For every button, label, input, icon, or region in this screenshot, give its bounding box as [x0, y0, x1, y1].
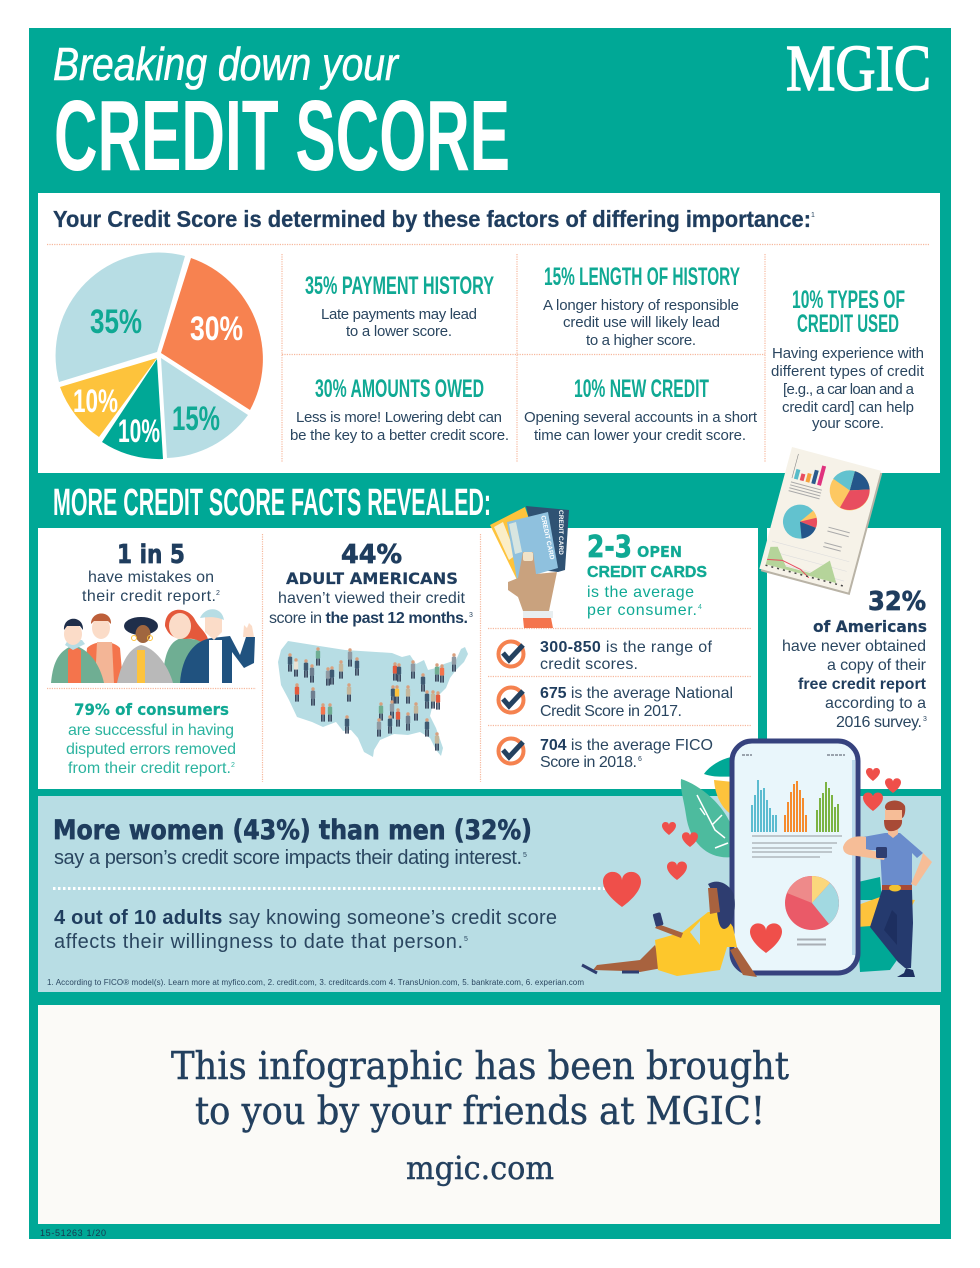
factor: new credit: time can lower your credit score.	[534, 427, 746, 444]
stat text: a copy of their	[827, 657, 927, 674]
title main line: CREDIT SCORE	[54, 80, 510, 192]
stat: 79% of consumers	[66, 700, 236, 777]
factor: types of credit: credit card] can help	[782, 399, 914, 416]
factor: amounts owed	[290, 375, 509, 444]
factor: amounts owed: Less is more! Lowering debt can	[296, 409, 502, 426]
footnotes: 1. According to FICO® model(s). Learn more at myfico.com, 2. credit.com, 3. creditcards.com 4. TransUnion.com, 5. bankrate.com, 6. experian.com	[47, 978, 584, 987]
stat: 44% adult americans: haven’t viewed their credit	[278, 590, 466, 607]
stat: 44% adult americans: 44%	[341, 540, 402, 570]
icon: report document	[759, 447, 883, 595]
fact: FICO average: Score in 2018.	[540, 754, 637, 771]
fact: national average	[498, 685, 733, 720]
factor: length of history: to a higher score.	[586, 332, 696, 349]
factor: payment history: Late payments may lead	[321, 306, 477, 323]
pie chart: 10%	[73, 383, 118, 419]
stat text: 32%	[868, 587, 926, 617]
dating stat: 4 out of 10: 4 out of 10 adults say knowing someone’s credit score	[54, 907, 557, 929]
icon: hand holding credit cards	[490, 506, 569, 628]
stat: 1 in 5: have mistakes on	[88, 569, 214, 586]
fact: national average: Credit Score in 2017.	[540, 703, 682, 720]
stat: 2-3 open credit cards: 4	[698, 604, 702, 611]
pie chart	[56, 253, 263, 459]
dating stat: women vs men: 5	[523, 852, 527, 859]
stat: 2-3 open credit cards: is the average	[587, 584, 694, 601]
illustration: woman with phone	[582, 882, 757, 977]
factor: new credit: Opening several accounts in a short	[524, 409, 758, 426]
fact: score range: 300-850 is the range of	[540, 639, 713, 656]
stat: 1 in 5: 1 in 5	[117, 540, 185, 570]
panel: credit score factors	[38, 193, 940, 473]
stat: 44% adult americans	[269, 540, 473, 627]
panel: credit score factors: 1	[811, 212, 815, 219]
illustration: phone with charts	[732, 741, 858, 973]
pie chart: 35%	[90, 303, 142, 341]
stat: 2-3 open credit cards: per consumer.	[587, 602, 697, 619]
factor: types of credit: [e.g., a car loan and a	[783, 381, 915, 398]
hearts	[603, 768, 901, 907]
factor: length of history: 15% LENGTH OF HISTORY	[544, 263, 740, 291]
dating stat: 4 out of 10: affects their willingness to date that person.	[54, 931, 463, 953]
stat text: free credit report	[798, 676, 927, 693]
MGIC logo: MGIC	[786, 32, 931, 105]
header	[53, 32, 931, 192]
title script line: Breaking down your	[53, 38, 399, 90]
fact: score range	[498, 639, 713, 673]
dating stat: 4 out of 10	[54, 907, 557, 953]
stat: 1 in 5: their credit report.	[82, 588, 216, 605]
illustration: man leaning on phone	[843, 800, 932, 977]
stat: 79% of consumers: 79% of consumers	[74, 700, 229, 719]
factor: payment history	[305, 272, 494, 340]
pie chart: 10%	[118, 413, 160, 449]
factor: new credit: 10% NEW CREDIT	[574, 375, 709, 403]
factor: types of credit: Having experience with	[772, 345, 924, 362]
panel: closing message	[38, 1005, 940, 1224]
dating stat: 4 out of 10: 5	[464, 936, 468, 943]
pie chart: 30%	[190, 310, 243, 348]
pie chart: 15%	[172, 400, 220, 438]
stat text: of Americans	[813, 617, 927, 636]
panel: credit facts	[38, 506, 758, 789]
stat: 79% of consumers: are successful in having	[68, 722, 234, 739]
stat: 79% of consumers: from their credit report.	[68, 760, 231, 777]
stat text	[782, 587, 927, 731]
factor: types of credit: your score.	[812, 415, 884, 432]
icon: hand holding credit cards: CREDIT CARD	[539, 515, 555, 561]
factor: length of history: credit use will likely lead	[563, 314, 720, 331]
dating stat: women vs men	[53, 815, 532, 869]
closing line one: This infographic has been brought	[171, 1044, 789, 1088]
facts heading: MORE CREDIT SCORE FACTS REVEALED:	[53, 482, 491, 524]
factor: types of credit	[771, 286, 925, 432]
stat: 79% of consumers: disputed errors removed	[66, 741, 236, 758]
stat: 44% adult americans: ADULT AMERICANS	[286, 569, 458, 588]
factor: types of credit: CREDIT USED	[797, 310, 899, 338]
factor: new credit	[524, 375, 758, 444]
stat: 2-3 open credit cards	[587, 530, 707, 619]
print code: 15-51263 1/20	[40, 1228, 106, 1238]
factor: amounts owed: 30% AMOUNTS OWED	[315, 375, 484, 403]
factor: types of credit: different types of credit	[771, 363, 925, 380]
icon: hand holding credit cards: CREDIT CARD	[557, 510, 564, 555]
stat: 2-3 open credit cards: CREDIT CARDS	[587, 564, 707, 581]
factor: types of credit: 10% TYPES OF	[792, 286, 905, 314]
panel: 32% of Americans	[759, 447, 941, 789]
factor: payment history: to a lower score.	[346, 323, 452, 340]
fact: FICO average	[498, 737, 713, 771]
factor: payment history: 35% PAYMENT HISTORY	[305, 272, 494, 300]
closing line two: to you by your friends at MGIC!	[195, 1089, 765, 1133]
stat text: have never obtained	[782, 638, 926, 655]
dating stat: women vs men: say a person’s credit score impacts their dating interest.	[54, 847, 522, 869]
fact: FICO average: 704 is the average FICO	[540, 737, 713, 754]
panel: dating and credit	[38, 741, 941, 992]
stat: 2-3 open credit cards: OPEN	[637, 543, 682, 561]
fact: FICO average: 6	[638, 756, 642, 763]
stat text: 2016 survey.	[836, 714, 922, 731]
stat: 44% adult americans: 3	[469, 612, 473, 619]
stat: 1 in 5: 2	[216, 590, 220, 597]
stat: 79% of consumers: 2	[231, 762, 235, 769]
illustration: leaves behind phone	[681, 757, 915, 972]
dating stat: women vs men: More women (43%) than men (32%)	[53, 815, 532, 846]
website: mgic.com	[406, 1149, 554, 1187]
factor: length of history: A longer history of responsible	[543, 297, 739, 314]
fact: score range: credit scores.	[540, 656, 638, 673]
factor: length of history	[543, 263, 740, 349]
fact: national average: 675 is the average National	[540, 685, 733, 702]
illustration: group of people	[51, 609, 255, 683]
map of US with people	[278, 641, 468, 757]
stat text: according to a	[825, 695, 926, 712]
stat: 2-3 open credit cards: 2-3	[587, 530, 632, 565]
factor: amounts owed: be the key to a better credit score.	[290, 427, 509, 444]
stat: 44% adult americans: score in the past 12 months.	[269, 610, 468, 627]
stat text: 3	[923, 716, 927, 723]
stat: 1 in 5	[82, 540, 220, 605]
factors heading: Your Credit Score is determined by these factors of differing importance:	[53, 206, 811, 232]
